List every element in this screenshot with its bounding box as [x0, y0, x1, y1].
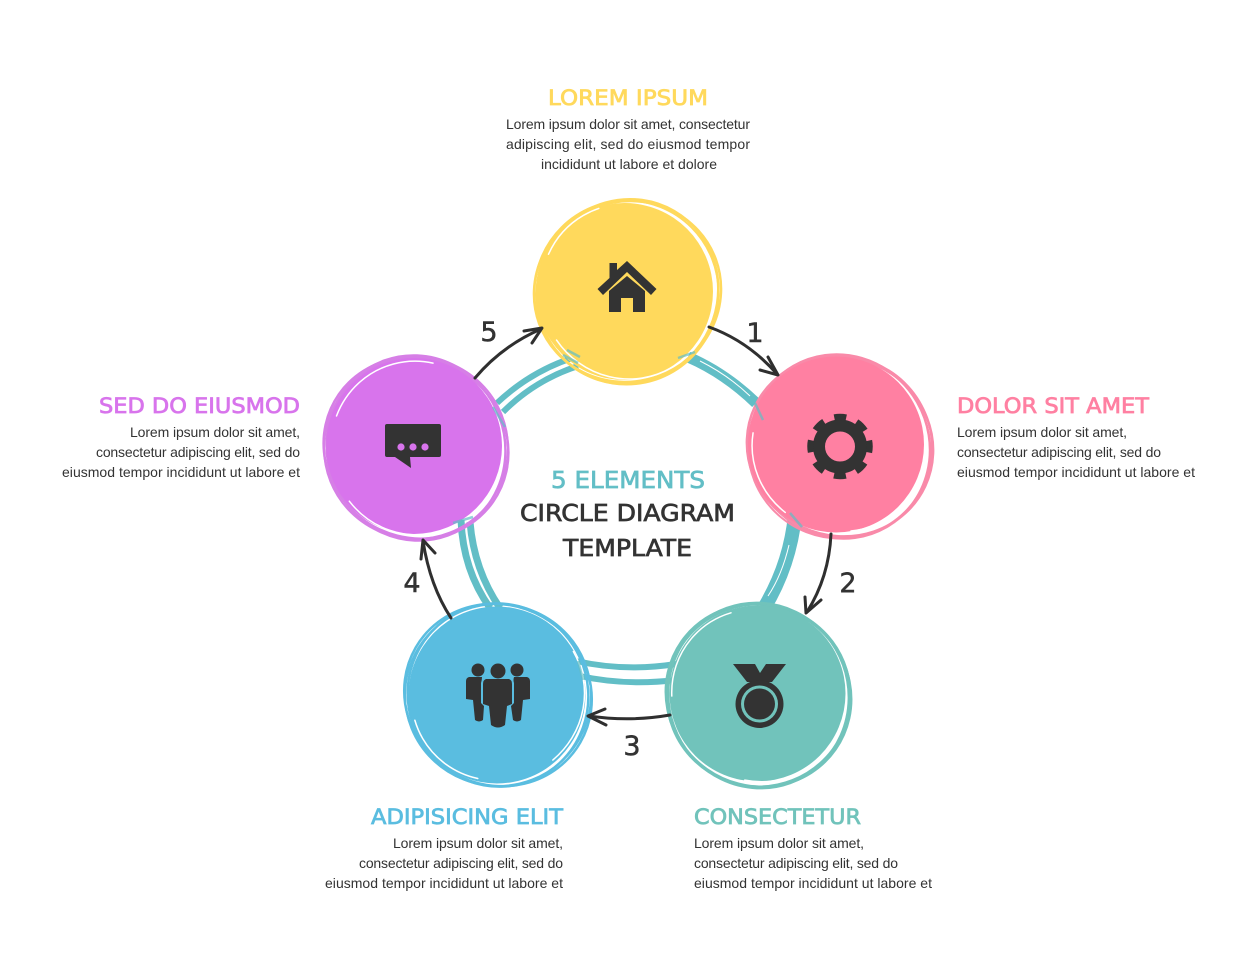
text block: adipisicing elit: eiusmod tempor incididunt ut labore et	[325, 875, 563, 891]
text block: consectetur: Lorem ipsum dolor sit amet,	[694, 835, 864, 851]
text block: lorem ipsum: Lorem ipsum dolor sit amet, consectetur	[506, 116, 750, 132]
text block: dolor sit amet: eiusmod tempor incididunt ut labore et	[957, 464, 1195, 480]
ring overlap marks on circles	[453, 350, 802, 680]
icon: medal	[733, 664, 786, 728]
text block: dolor sit amet: Lorem ipsum dolor sit amet,	[957, 424, 1127, 440]
text block: sed do eiusmod: Lorem ipsum dolor sit amet,	[130, 424, 300, 440]
center title	[520, 468, 735, 562]
center title: CIRCLE DIAGRAM	[520, 501, 735, 527]
text block: sed do eiusmod: eiusmod tempor incididunt ut labore et	[62, 464, 300, 480]
arrow 3	[588, 709, 670, 725]
text block: sed do eiusmod: consectetur adipiscing elit, sed do	[96, 444, 300, 460]
center title: 5 ELEMENTS	[551, 468, 705, 494]
text block: dolor sit amet: DOLOR SIT AMET	[957, 394, 1150, 419]
circle 3: green	[630, 568, 887, 823]
icon: people	[466, 664, 530, 728]
text block: consectetur: consectetur adipiscing elit, sed do	[694, 855, 898, 871]
circle 1: yellow	[503, 166, 752, 417]
text block: lorem ipsum: LOREM IPSUM	[548, 86, 708, 111]
text block: sed do eiusmod	[62, 394, 300, 480]
arrow 5	[475, 328, 542, 378]
text block: consectetur	[694, 805, 932, 891]
circle 4: blue	[371, 570, 625, 820]
text block: sed do eiusmod: SED DO EIUSMOD	[99, 394, 300, 419]
text block: adipisicing elit	[325, 805, 564, 891]
text block: consectetur: CONSECTETUR	[694, 805, 861, 830]
text block: consectetur: eiusmod tempor incididunt ut labore et	[694, 875, 932, 891]
arrow 1	[709, 327, 778, 375]
text block: lorem ipsum: adipiscing elit, sed do eiusmod tempor	[506, 136, 750, 152]
icon: house	[598, 261, 656, 312]
arrow 2	[805, 534, 831, 613]
text block: dolor sit amet: consectetur adipiscing elit, sed do	[957, 444, 1161, 460]
text block: lorem ipsum: incididunt ut labore et dolore	[541, 156, 717, 172]
text block: adipisicing elit: Lorem ipsum dolor sit amet,	[393, 835, 563, 851]
text block: adipisicing elit: ADIPISICING ELIT	[371, 805, 564, 830]
arrow 4	[421, 540, 451, 618]
circle 2: pink	[716, 321, 964, 572]
text block: adipisicing elit: consectetur adipiscing elit, sed do	[359, 855, 563, 871]
step number 2: 2	[839, 568, 857, 599]
icon: speech bubble	[385, 424, 441, 468]
step number 4: 4	[403, 568, 421, 599]
step number 3: 3	[623, 731, 641, 762]
center title: TEMPLATE	[562, 536, 692, 562]
text block: dolor sit amet	[957, 394, 1195, 480]
text block: lorem ipsum	[506, 86, 750, 172]
step number 5: 5	[480, 317, 498, 348]
connecting ring	[461, 357, 795, 682]
step number 1: 1	[746, 318, 764, 349]
icon: gear	[805, 412, 875, 481]
circle 5: purple	[288, 321, 544, 575]
